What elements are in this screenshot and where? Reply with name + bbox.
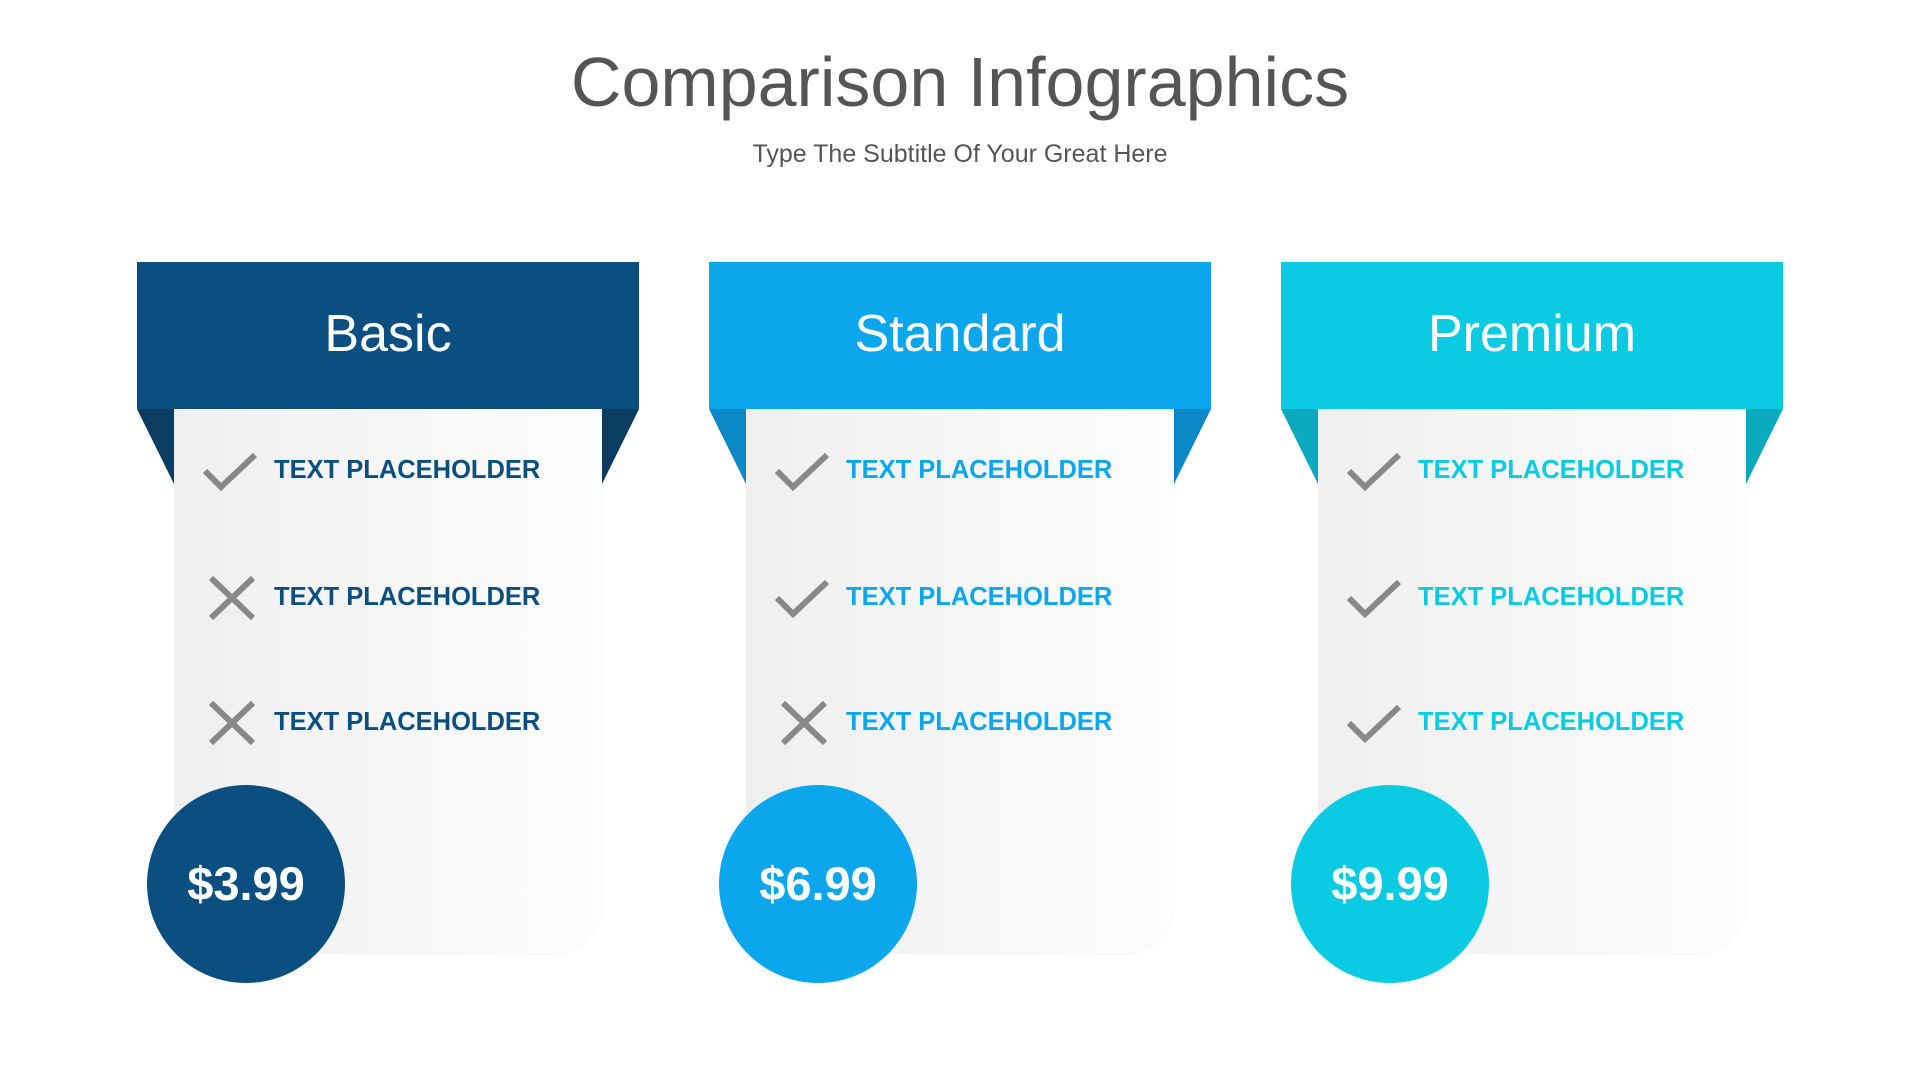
price: $6.99 bbox=[759, 857, 877, 910]
header: standard: Standard bbox=[854, 305, 1066, 363]
body bbox=[174, 409, 602, 953]
row 3: TEXT PLACEHOLDER bbox=[274, 708, 540, 736]
header: standard bbox=[709, 262, 1211, 409]
row 1 bbox=[775, 453, 1112, 491]
fold triangles bbox=[137, 409, 639, 484]
row 3 bbox=[781, 701, 1112, 745]
header: basic bbox=[137, 262, 639, 409]
row 2: TEXT PLACEHOLDER bbox=[274, 583, 540, 611]
row 3 bbox=[1347, 705, 1684, 743]
row 1 bbox=[1347, 453, 1684, 491]
panel: standard bbox=[709, 262, 1211, 983]
row 2 bbox=[1347, 580, 1684, 618]
body bbox=[746, 409, 1174, 953]
row 2: TEXT PLACEHOLDER bbox=[846, 583, 1112, 611]
row 3: TEXT PLACEHOLDER bbox=[846, 708, 1112, 736]
header: premium bbox=[1281, 262, 1783, 409]
body bbox=[1318, 409, 1746, 953]
row 3: TEXT PLACEHOLDER bbox=[1418, 708, 1684, 736]
subtitle: Type The Subtitle Of Your Great Here bbox=[752, 140, 1168, 168]
row 2 bbox=[209, 576, 540, 620]
row 1: TEXT PLACEHOLDER bbox=[1418, 456, 1684, 484]
price: $9.99 bbox=[1331, 857, 1449, 910]
price: $3.99 bbox=[187, 857, 305, 910]
panel: basic bbox=[137, 262, 639, 983]
row 1 bbox=[203, 453, 540, 491]
row 1: TEXT PLACEHOLDER bbox=[274, 456, 540, 484]
fold triangles bbox=[709, 409, 1211, 484]
row 3 bbox=[209, 701, 540, 745]
fold triangles bbox=[1281, 409, 1783, 484]
price bbox=[147, 785, 345, 983]
header: basic: Basic bbox=[324, 305, 452, 363]
price bbox=[1291, 785, 1489, 983]
row 2: TEXT PLACEHOLDER bbox=[1418, 583, 1684, 611]
price bbox=[719, 785, 917, 983]
title: Comparison Infographics bbox=[571, 43, 1349, 121]
header: premium: Premium bbox=[1428, 305, 1636, 363]
panel: premium bbox=[1281, 262, 1783, 983]
row 2 bbox=[775, 580, 1112, 618]
row 1: TEXT PLACEHOLDER bbox=[846, 456, 1112, 484]
